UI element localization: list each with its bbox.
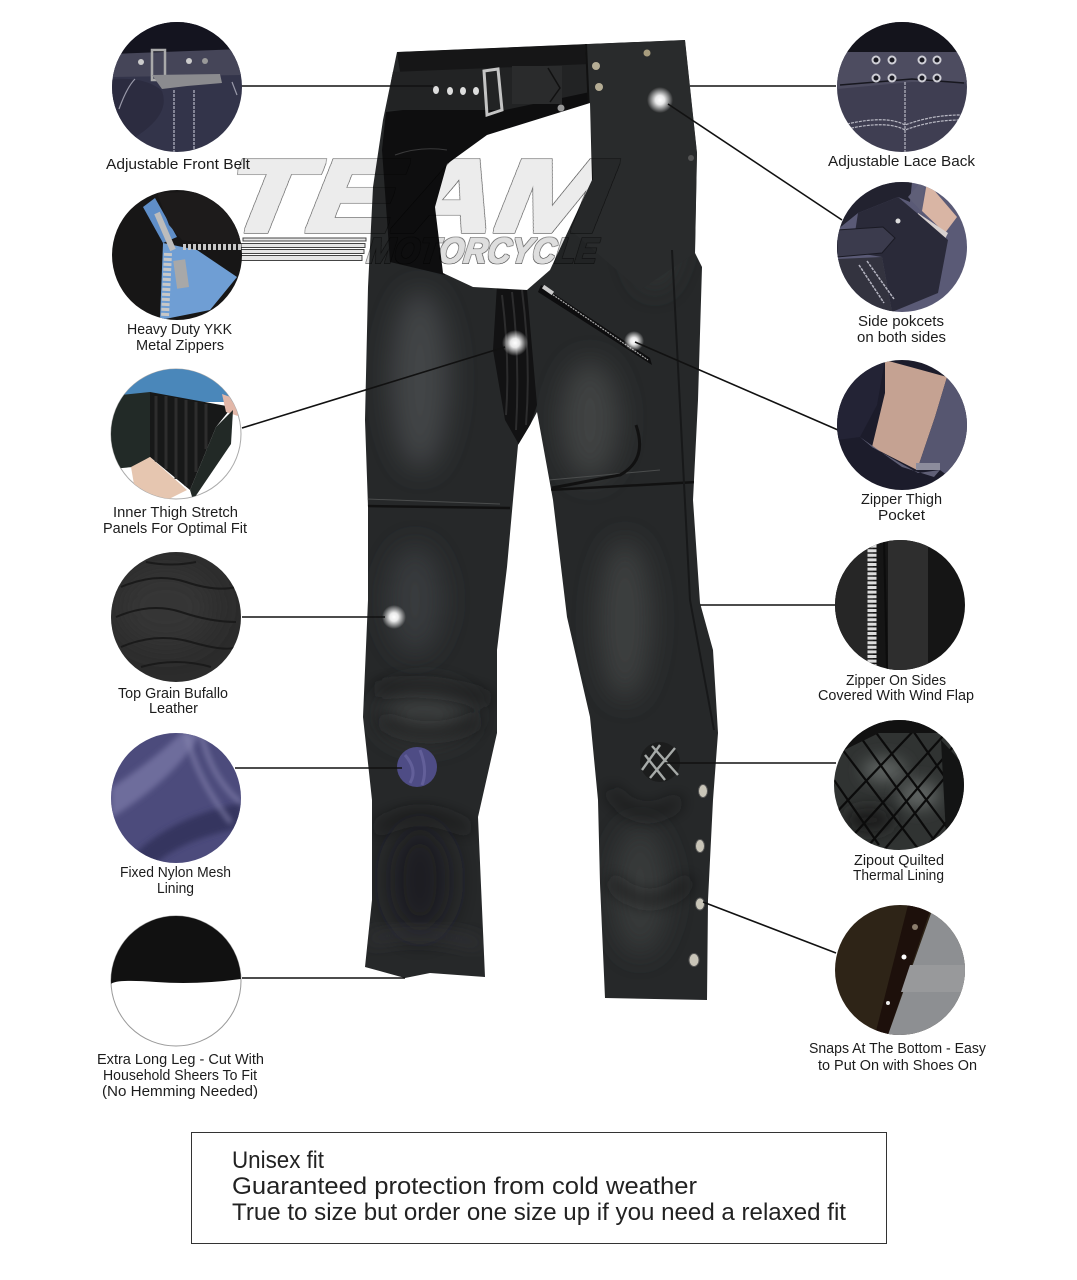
label: side zipper with wind flap [818, 673, 974, 704]
label: extra long leg [97, 1052, 264, 1100]
logo: Team Motorcycle watermark: MOTORCYCLE [365, 230, 602, 271]
photo circle: front belt [112, 22, 242, 152]
label: side zipper with wind flap: Covered With Wind Flap [818, 688, 974, 704]
photo circle: top grain buffalo leather [111, 552, 241, 682]
label: YKK zippers: Heavy Duty YKK [127, 322, 232, 338]
knee swatch: mesh [397, 747, 437, 787]
side snaps [689, 784, 708, 966]
label: bottom snaps [809, 1041, 987, 1074]
photo circle: nylon mesh lining [111, 733, 241, 863]
knee swatch: quilting [640, 742, 680, 782]
photo circle: side zipper with wind flap [835, 540, 965, 670]
side seam [672, 250, 714, 730]
info box: Guaranteed protection from cold weather [232, 1173, 697, 1200]
leader lines [235, 86, 842, 978]
stretch panel [493, 285, 537, 450]
label: zipper thigh pocket [861, 492, 942, 524]
photo circle: YKK zippers [112, 190, 242, 320]
photo circle: inner thigh stretch panels [111, 369, 241, 500]
label: quilted thermal lining: Thermal Lining [853, 868, 944, 884]
info box [192, 1132, 886, 1244]
knee wrinkles [375, 687, 690, 900]
chaps illustration [363, 40, 718, 1000]
label: extra long leg: (No Hemming Needed) [102, 1084, 258, 1100]
logo: Team Motorcycle watermark: TEAM [219, 138, 622, 253]
label: zipper thigh pocket: Zipper Thigh [861, 492, 942, 508]
leg opening [435, 103, 592, 290]
label: top grain buffalo leather: Top Grain Bufallo [118, 686, 228, 702]
label: quilted thermal lining: Zipout Quilted [854, 853, 944, 869]
info box: True to size but order one size up if you need a relaxed fit [232, 1199, 846, 1226]
label: extra long leg: Household Sheers To Fit [103, 1068, 257, 1084]
thigh pocket curve [552, 425, 640, 488]
label: nylon mesh lining: Fixed Nylon Mesh [120, 865, 231, 881]
label: nylon mesh lining: Lining [157, 881, 194, 897]
label: nylon mesh lining [120, 865, 231, 897]
label: front belt: Adjustable Front Belt [106, 157, 250, 173]
label: bottom snaps: Snaps At The Bottom - Easy [809, 1041, 987, 1057]
label: lace back: Adjustable Lace Back [828, 154, 976, 170]
label: extra long leg: Extra Long Leg - Cut With [97, 1052, 264, 1068]
photo circle: lace back [837, 22, 967, 152]
belt [388, 64, 590, 110]
label: side pockets [857, 314, 946, 346]
label: top grain buffalo leather [118, 686, 228, 717]
label: top grain buffalo leather: Leather [149, 701, 198, 717]
label: inner thigh stretch panels: Inner Thigh Stretch [113, 505, 238, 521]
label: quilted thermal lining [853, 853, 944, 884]
photo circle: quilted thermal lining [834, 720, 964, 850]
zipper pocket [538, 285, 652, 365]
photo circle: side pockets [837, 177, 967, 312]
photo circle: zipper thigh pocket [837, 360, 967, 490]
label: side pockets: Side pokcets [858, 314, 944, 330]
logo: Team Motorcycle watermark [219, 138, 622, 271]
thigh seam [367, 482, 697, 508]
cuff fold [368, 930, 447, 938]
label: YKK zippers: Metal Zippers [136, 338, 224, 354]
label: bottom snaps: to Put On with Shoes On [818, 1058, 977, 1074]
photo circle: extra long leg [111, 916, 241, 1046]
right waist panel [587, 40, 697, 258]
label: inner thigh stretch panels: Panels For Optimal Fit [103, 521, 247, 537]
label: side zipper with wind flap: Zipper On Sides [846, 673, 946, 689]
highlight dots [382, 87, 673, 629]
info box: Unisex fit [232, 1147, 324, 1174]
label: inner thigh stretch panels [103, 505, 247, 537]
label: zipper thigh pocket: Pocket [878, 508, 925, 524]
waist lining [397, 44, 590, 72]
label: side pockets: on both sides [857, 330, 946, 346]
belt buckle and holes [433, 50, 694, 161]
label: YKK zippers [127, 322, 232, 354]
photo circle: bottom snaps [835, 905, 965, 1035]
